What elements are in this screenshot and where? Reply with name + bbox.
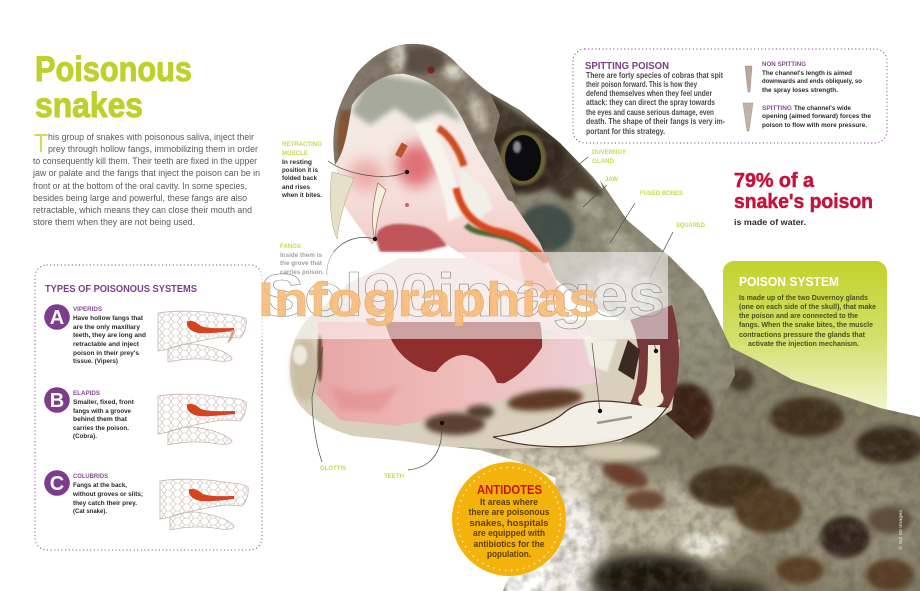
spitting poison body text: There are forty species of cobras that spit xyxy=(586,71,723,80)
snake neck and body xyxy=(430,170,920,591)
label: retracting muscle: and rises xyxy=(282,184,310,191)
callout: 79% of a snake's poison xyxy=(734,170,873,227)
jaw edge shading xyxy=(580,443,660,461)
intro paragraph: his group of snakes with poisonous saliva, inject their xyxy=(48,132,254,142)
spitting poison body text: defend themselves when they feel under xyxy=(586,89,712,98)
non spitting text: The channel's length is aimed xyxy=(762,70,852,77)
type B: elapids: behind them that xyxy=(73,416,128,423)
type C: colubrids: (Cat snake). xyxy=(73,508,107,515)
non spitting text xyxy=(762,61,862,94)
type B: elapids: (Cobra). xyxy=(73,433,97,440)
label: retracting muscle: MUSCLE xyxy=(282,150,308,157)
label: retracting muscle: RETRACTING xyxy=(282,141,322,148)
intro paragraph: store them when they are not being used. xyxy=(33,217,195,227)
watermark: Infographias xyxy=(258,274,600,327)
type C: colubrids xyxy=(44,470,143,515)
label: retracting muscle: position it is xyxy=(282,167,318,174)
callout: 79% of a snake's poison: 79% of a xyxy=(734,170,815,192)
panel: poison system: contractions pressure the glands that xyxy=(739,330,865,339)
type A: viperids: VIPERIDS xyxy=(73,306,102,313)
icon: viperid head xyxy=(158,311,246,362)
icon: spitting fang xyxy=(743,103,753,131)
label: fangs: Inside them is xyxy=(280,252,322,259)
mouth: lower jaw xyxy=(290,258,680,449)
heading: spitting poison: SPITTING POISON xyxy=(585,60,669,72)
label: retracting muscle: In resting xyxy=(282,159,312,166)
spitting poison body text: death. The shape of their fangs is very im- xyxy=(586,117,725,126)
type A: viperids: are the only maxillary xyxy=(73,324,140,331)
spitting text: opening (aimed forward) forces the xyxy=(762,113,871,120)
icon: non spitting fang xyxy=(745,66,752,92)
panel: poison system: (one on each side of the skull), that make xyxy=(739,302,876,311)
callout: 79% of a snake's poison: snake's poison xyxy=(734,191,873,213)
watermark: Sol90images xyxy=(260,262,665,329)
snake photo illustration xyxy=(290,40,920,591)
type B: elapids: Smaller, fixed, front xyxy=(73,399,135,406)
label: retracting muscle xyxy=(281,141,322,199)
type A: viperids: A xyxy=(50,307,64,329)
label: fangs: carries poison. xyxy=(280,269,324,276)
spitting text xyxy=(762,105,871,129)
label: fangs xyxy=(280,243,324,276)
spitting text: poison to flow with more pressure. xyxy=(762,122,867,129)
panel: poison system: activate the injection mechanism. xyxy=(748,339,859,348)
fang xyxy=(330,172,354,239)
label: duvernoy gland: DUVERNOY xyxy=(592,149,627,156)
hollow fang xyxy=(373,183,386,240)
head shell xyxy=(330,40,530,240)
icon: elapid head xyxy=(158,394,246,445)
white lower bone xyxy=(493,401,667,447)
type B: elapids: fangs with a groove xyxy=(73,408,131,415)
callout: antidotes: It areas where xyxy=(480,497,538,507)
type A: viperids xyxy=(44,304,146,365)
panel: poison system: Is made up of the two Duvernoy glands xyxy=(739,293,868,302)
type B: elapids: ELAPIDS xyxy=(73,390,100,397)
spitting poison body text xyxy=(586,71,725,136)
label: duvernoy gland xyxy=(592,149,627,165)
type A: viperids: retractable and inject xyxy=(73,341,140,348)
spitting text: The channel's wide xyxy=(794,105,851,112)
non spitting text: NON SPITTING xyxy=(762,61,806,68)
label: glottis: GLOTTIS xyxy=(320,465,346,472)
white quadrate bone xyxy=(638,345,664,408)
heading: types of poisonous systems: TYPES OF POISONOUS SYSTEMS xyxy=(45,283,197,295)
callout: antidotes: ANTIDOTES xyxy=(477,483,542,497)
icon: colubrid head xyxy=(160,479,248,530)
type B: elapids: B xyxy=(50,390,64,412)
type A: viperids: Have hollow fangs that xyxy=(73,315,144,322)
type C: colubrids: without groves or slits; xyxy=(72,491,143,498)
panel: poison system: POISON SYSTEM xyxy=(739,275,839,289)
label: fangs: FANGS xyxy=(280,243,301,250)
mouth: upper palate xyxy=(336,68,562,300)
callout: antidotes: are equipped with xyxy=(473,528,545,538)
label: teeth: TEETH xyxy=(384,473,405,480)
maroon hinge cavity xyxy=(628,305,679,408)
spitting poison body text: their poison forward. This is how they xyxy=(586,80,698,89)
title: Poisonous xyxy=(35,50,192,89)
intro paragraph: retractable, which means they can close their mouth and xyxy=(33,205,252,215)
type A: viperids: poison in their prey's xyxy=(73,350,139,357)
spitting poison body text: the eyes and cause serious damage, even xyxy=(586,108,714,117)
callout: antidotes: there are poisonous xyxy=(468,507,550,517)
panel: poison system xyxy=(723,261,887,431)
snake head side xyxy=(490,93,735,444)
panel: poison system: fangs. When the snake bites, the muscle xyxy=(739,320,873,329)
photo credit: © Sol 90 Images xyxy=(897,509,903,550)
label: fused bones: FUSED BONES xyxy=(640,190,683,197)
label: duvernoy gland: GLAND xyxy=(592,158,615,165)
callout: antidotes: population. xyxy=(487,549,531,559)
type B: elapids xyxy=(44,387,135,440)
intro paragraph: T xyxy=(34,128,48,158)
label: retracting muscle: when it bites. xyxy=(281,192,322,199)
snake eye xyxy=(500,131,546,185)
callout: antidotes: snakes, hospitals xyxy=(470,518,549,528)
intro paragraph xyxy=(32,128,260,227)
callout: 79% of a snake's poison: is made of water. xyxy=(734,217,806,227)
title xyxy=(35,50,192,125)
panel: types of poisonous systems xyxy=(35,265,262,550)
label: fangs: the grove that xyxy=(280,260,323,267)
panel: poison system: the poison and are connected to the xyxy=(739,311,858,320)
label: squared: SQUARED xyxy=(676,222,705,229)
intro paragraph: front or at the bottom of the oral cavity. In some species, xyxy=(33,181,247,191)
type C: colubrids: Fangs at the back, xyxy=(73,482,127,489)
type C: colubrids: C xyxy=(50,473,64,495)
spitting poison body text: attack: they can direct the spray towards xyxy=(586,98,716,107)
callout: antidotes xyxy=(452,462,566,576)
intro paragraph: to consequently kill them. Their teeth are fixed in the upper xyxy=(33,156,257,166)
watermark xyxy=(258,252,668,339)
non spitting text: downwards and ends obliquely, so xyxy=(762,78,862,85)
intro paragraph: besides being large and powerful, these fangs are also xyxy=(33,193,247,203)
non spitting text: the spray loses strength. xyxy=(762,87,838,94)
type A: viperids: teeth, they are long and xyxy=(73,332,146,339)
intro paragraph: jaw or palate and the fangs that inject the poison can be in xyxy=(32,168,260,178)
leader lines xyxy=(312,157,673,470)
panel: spitting poison xyxy=(573,49,887,143)
callout: antidotes: antibiotics for the xyxy=(474,539,545,549)
label: retracting muscle: folded back xyxy=(282,175,317,182)
type C: colubrids: they catch their prey. xyxy=(73,500,137,507)
spitting text: SPITTING xyxy=(762,105,792,112)
label: jaw: JAW xyxy=(605,176,618,183)
intro paragraph: prey through hollow fangs, immobilizing them in order xyxy=(48,144,258,154)
type A: viperids: tissue. (Vipers) xyxy=(73,358,118,365)
title: snakes xyxy=(35,86,143,125)
spitting poison body text: portant for this strategy. xyxy=(586,127,665,136)
type C: colubrids: COLUBRIDS xyxy=(73,473,108,480)
type B: elapids: carries the poison. xyxy=(73,425,129,432)
